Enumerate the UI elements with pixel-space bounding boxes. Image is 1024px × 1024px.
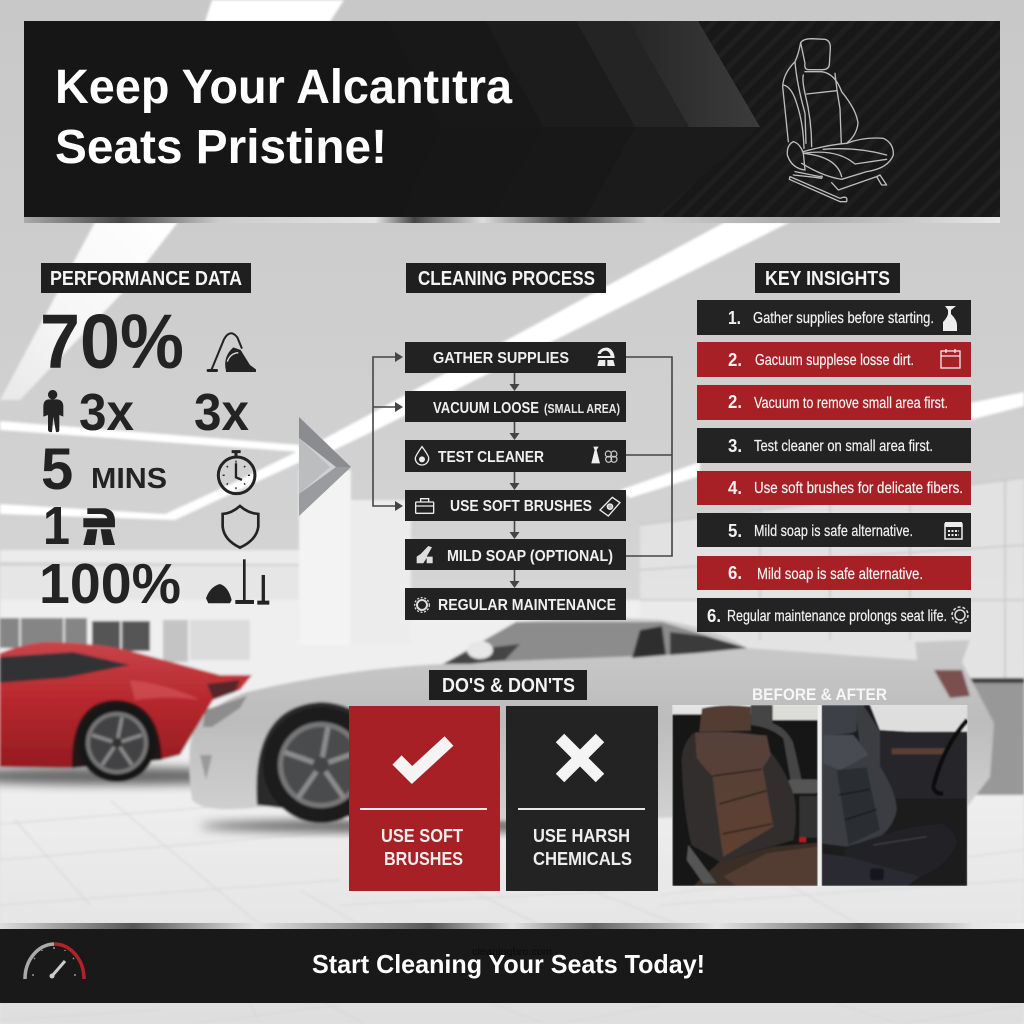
stat: 100%: 100% <box>39 552 181 616</box>
icon: shield <box>223 506 258 548</box>
rear wall <box>0 566 300 626</box>
photo: after seat <box>822 705 967 886</box>
card: do: USE SOFT <box>381 826 463 846</box>
panel: before and after <box>672 685 967 886</box>
panel: dos and don'ts <box>349 670 658 891</box>
carbon texture <box>655 21 1000 217</box>
step: use soft brushes <box>405 490 626 521</box>
panel: performance data <box>39 263 269 616</box>
title: Seats Pristine! <box>55 121 387 174</box>
chevrons <box>388 21 760 217</box>
insight row 4 <box>697 428 971 463</box>
arrow: silver chevron <box>299 417 351 516</box>
step: gather supplies: GATHER SUPPLIES <box>433 350 569 367</box>
insight row 3: Vacuum to remove small area first. <box>754 395 948 412</box>
stat: 70%: 70% <box>40 299 184 385</box>
watermark: cleaningbro.com <box>472 946 552 958</box>
column <box>299 470 351 645</box>
icon: person <box>43 390 63 432</box>
red car <box>0 642 252 782</box>
grey cabinet <box>970 680 1024 795</box>
footer banner <box>0 923 1024 1003</box>
call to action: Start Cleaning Your Seats Today! <box>312 949 705 979</box>
stat: 3x: 3x <box>79 384 134 442</box>
insight row 7: Mild soap is safe alternative. <box>757 566 923 583</box>
insight row 6: Mild soap is safe alternative. <box>754 523 913 540</box>
silver strip <box>24 217 1000 223</box>
step: mild soap: MILD SOAP (OPTIONAL) <box>447 548 613 565</box>
shadows under cars <box>0 767 280 785</box>
insight row 8: Regular maintenance prolongs seat life. <box>727 608 947 625</box>
stat: 5 mins: 5 <box>41 437 73 502</box>
heading: dos and don'ts <box>429 670 587 700</box>
floor <box>0 770 1024 1024</box>
insight row 4: 3. <box>728 436 742 456</box>
heading: cleaning process <box>406 263 606 293</box>
insight row 5: Use soft brushes for delicate fibers. <box>754 480 963 497</box>
icon: car seat outline <box>783 39 893 202</box>
ceiling light streaks <box>0 0 1024 564</box>
icon: stopwatch <box>218 452 255 494</box>
insight row 1 <box>697 300 971 335</box>
icon: cleaning tools <box>206 559 269 605</box>
insight row 2: Gacuum supplese losse dirt. <box>755 352 914 369</box>
stat: 1: 1 <box>43 496 70 556</box>
connector arrowheads <box>395 352 520 588</box>
heading: performance data: PERFORMANCE DATA <box>50 268 242 290</box>
icon: seat symbol <box>83 508 115 545</box>
silver strip <box>0 923 1024 929</box>
step: regular maintenance: REGULAR MAINTENANCE <box>438 597 616 614</box>
title <box>55 61 512 174</box>
step: gather supplies <box>405 342 626 373</box>
step: regular maintenance <box>405 588 626 620</box>
step: use soft brushes: USE SOFT BRUSHES <box>450 498 592 515</box>
card: do: BRUSHES <box>384 849 463 869</box>
heading: before and after: BEFORE & AFTER <box>752 685 887 704</box>
step: vacuum loose <box>405 391 626 422</box>
heading: performance data <box>41 263 251 293</box>
stat: 3x repeat: 3x <box>194 384 249 442</box>
insight row 5 <box>697 471 971 505</box>
insight row 7: 6. <box>728 563 742 583</box>
windows at back <box>0 618 250 662</box>
photo: before seat <box>672 705 818 886</box>
step: mild soap <box>405 539 626 570</box>
insight row 5: 4. <box>728 478 742 498</box>
flow connectors <box>373 357 672 586</box>
card: do <box>349 706 500 891</box>
heading: dos and don'ts: DO'S & DON'TS <box>442 675 575 697</box>
card: don't <box>506 706 658 891</box>
insight row 6: 5. <box>728 521 742 541</box>
stat: 5 mins: MINS <box>91 463 167 495</box>
insight row 2 <box>697 342 971 377</box>
step: vacuum loose: VACUUM LOOSE <box>433 400 539 417</box>
insight row 8 <box>697 598 971 632</box>
heading: key insights: KEY INSIGHTS <box>765 268 890 290</box>
panel: cleaning process <box>373 263 672 620</box>
insight row 7 <box>697 556 971 590</box>
insight row 1: 1. <box>728 308 741 328</box>
header banner <box>24 21 1000 223</box>
insight row 8: 6. <box>707 606 721 626</box>
insight row 4: Test cleaner on small area first. <box>754 438 933 455</box>
step: vacuum loose: (SMALL AREA) <box>544 401 620 416</box>
icon: vacuum <box>207 333 256 372</box>
panel: key insights <box>697 263 971 632</box>
heading: key insights <box>755 263 900 293</box>
step: test cleaner: TEST CLEANER <box>438 449 544 466</box>
insight row 6 <box>697 513 971 547</box>
card: don't: CHEMICALS <box>533 849 632 869</box>
insight row 3: 2. <box>728 392 742 412</box>
stat: 5 mins <box>41 437 167 502</box>
wall panels <box>640 478 1024 680</box>
step: test cleaner <box>405 440 626 472</box>
silver car <box>189 618 994 823</box>
icon: gauge <box>25 944 84 979</box>
insight row 1: Gather supplies before starting. <box>753 310 934 327</box>
insight row 3 <box>697 385 971 420</box>
heading: cleaning process: CLEANING PROCESS <box>418 268 595 290</box>
card: don't: USE HARSH <box>533 826 630 846</box>
insight row 2: 2. <box>728 350 742 370</box>
title: Keep Your Alcantıtra <box>55 61 512 114</box>
